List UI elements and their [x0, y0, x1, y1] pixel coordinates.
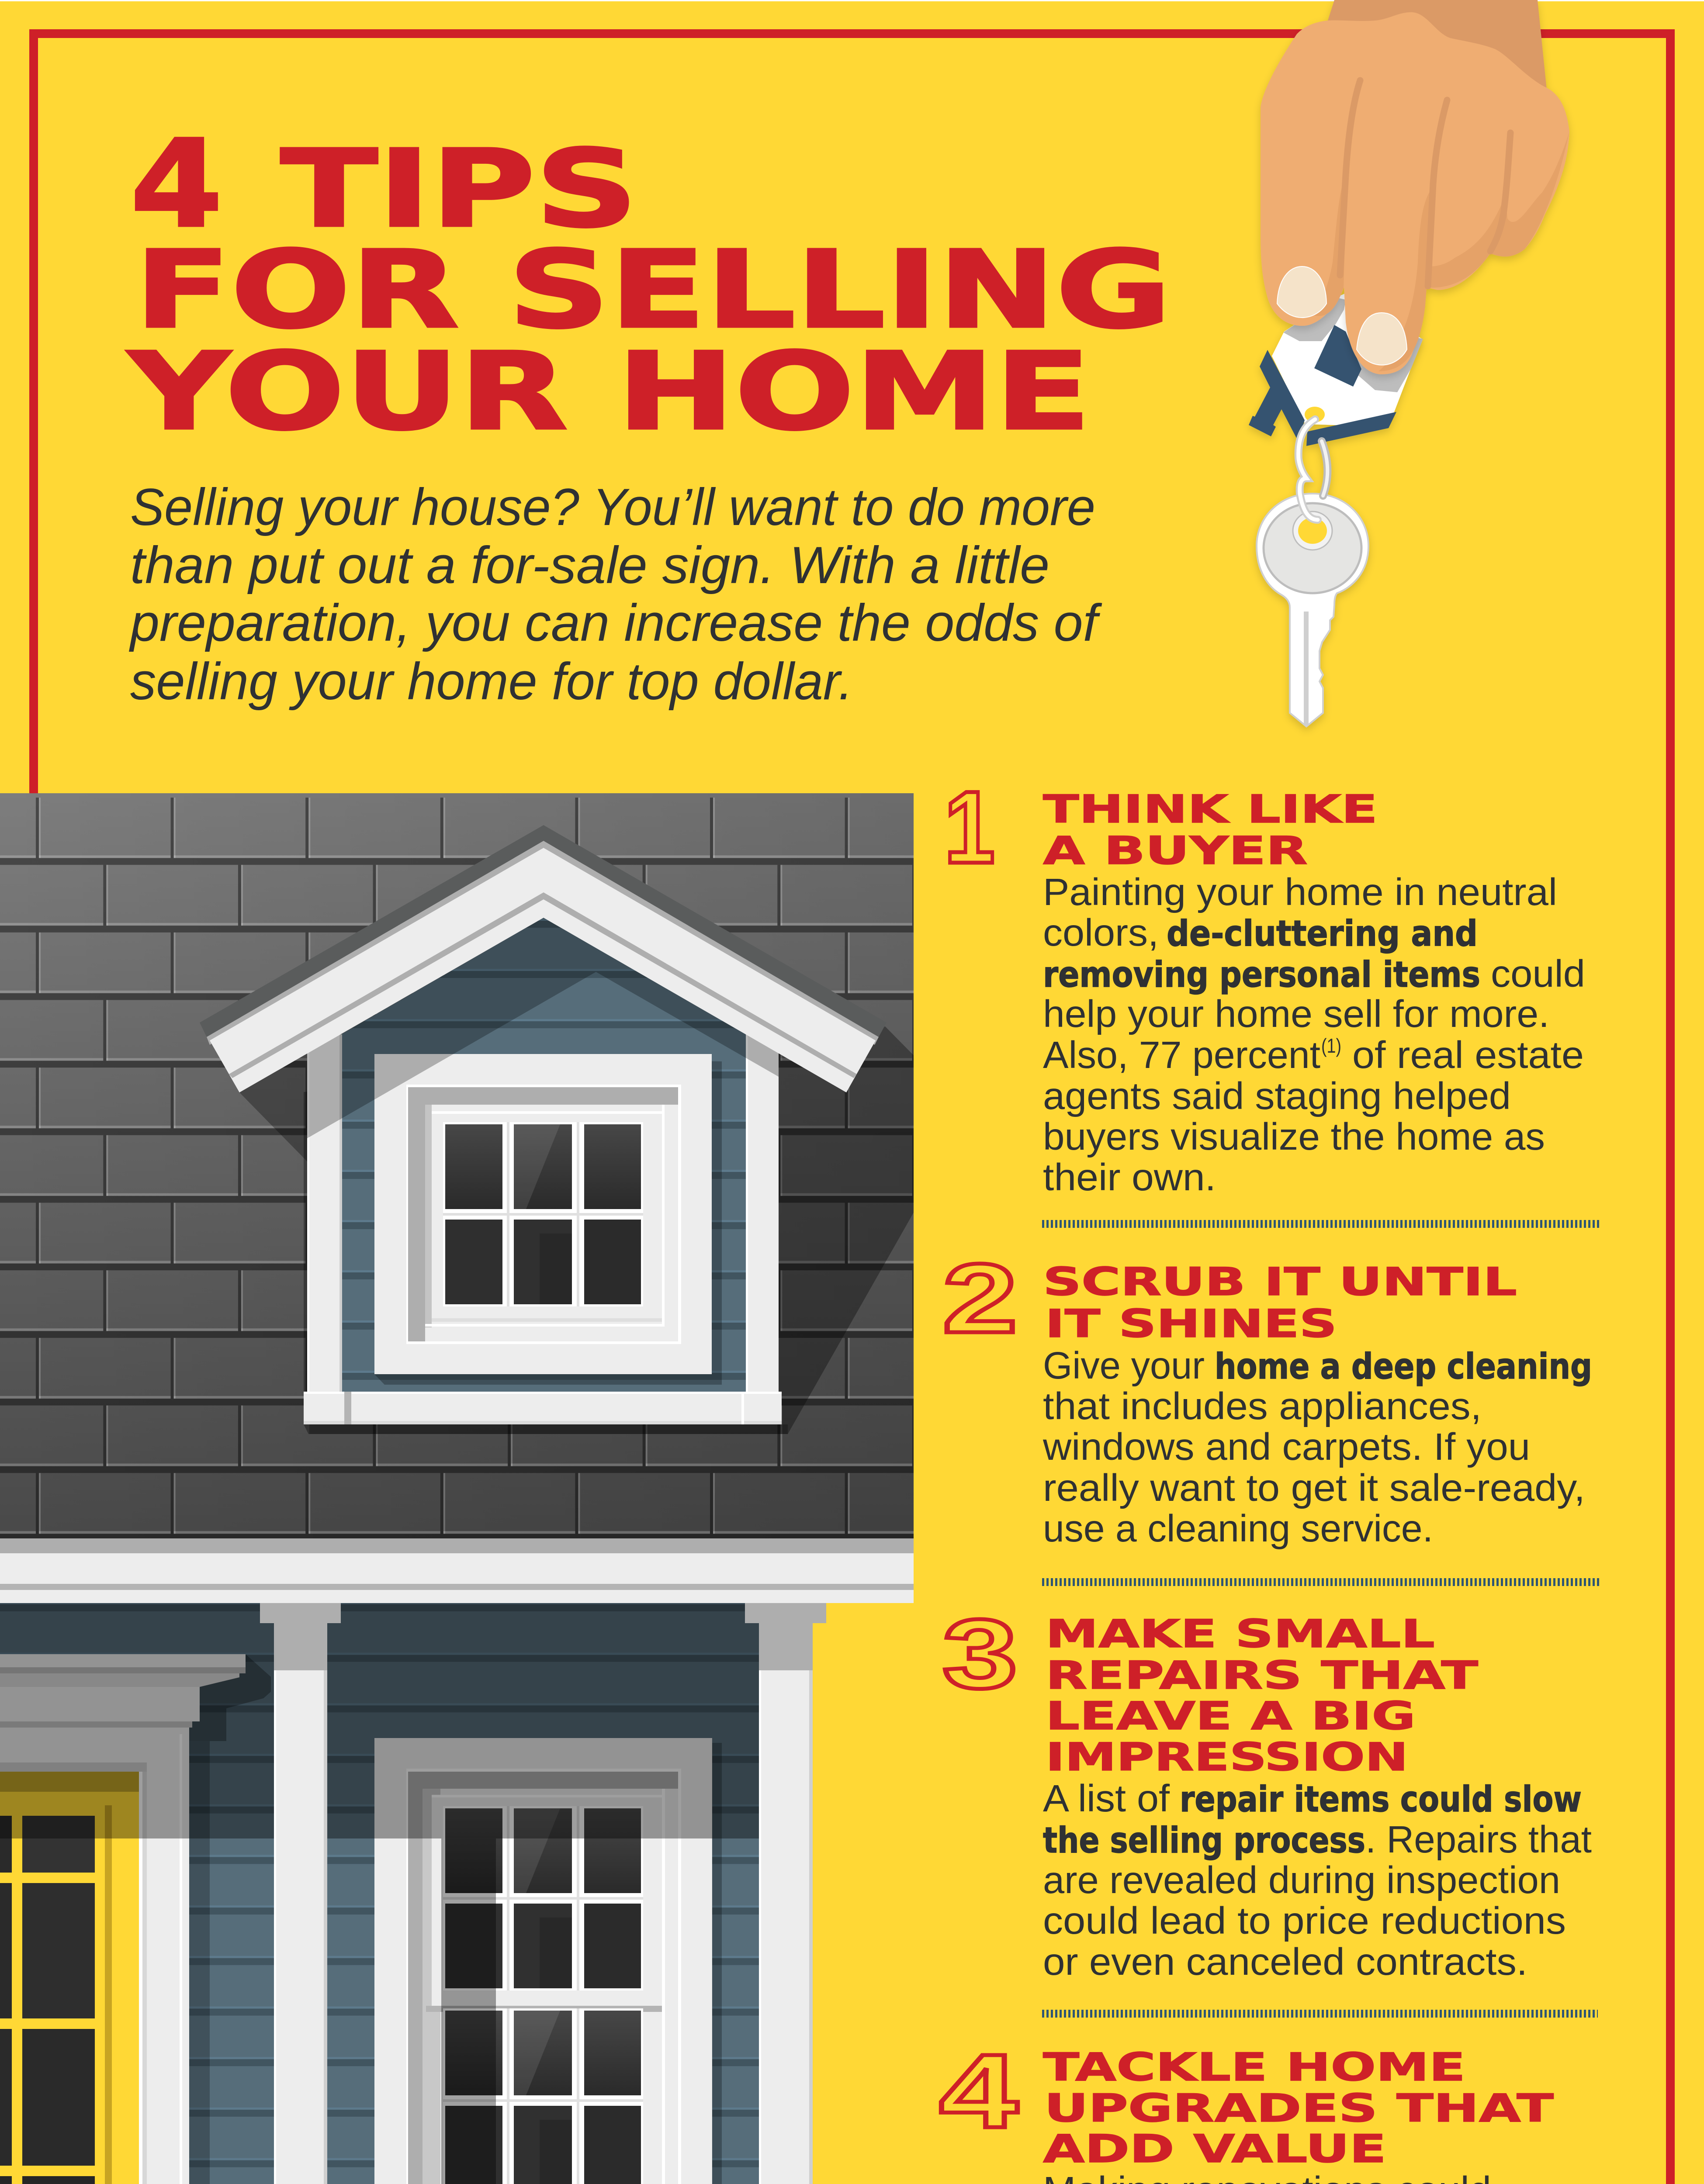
house illustration	[0, 793, 914, 2184]
tip 2 heading: IT SHINES	[1045, 1301, 1337, 1346]
tip 1 body: Also, 77 percent	[1043, 1034, 1320, 1076]
intro text: than put out a for-sale sign. With a little	[130, 536, 1049, 594]
tip 2 body: home a deep cleaning	[1215, 1346, 1592, 1387]
tip 1 heading: A BUYER	[1043, 828, 1308, 873]
title	[126, 114, 1171, 454]
tip 1 body: removing personal items	[1043, 954, 1480, 995]
tip 1 body: colors,	[1043, 912, 1159, 954]
tip 1 body: of real estate	[1352, 1034, 1584, 1076]
icon: fingernails	[1277, 266, 1407, 365]
porch roof shade	[0, 1603, 813, 1838]
porch window	[374, 1738, 712, 2184]
tip 2 body: Give your	[1043, 1344, 1205, 1387]
tip 1 body: (1)	[1321, 1034, 1341, 1057]
icon: hand	[1261, 0, 1569, 374]
tip 4 heading: ADD VALUE	[1043, 2126, 1386, 2171]
tip 3 body: repair items could slow	[1180, 1779, 1582, 1820]
porch wall	[0, 1603, 813, 2184]
title: FOR SELLING	[135, 228, 1171, 352]
icon: house tag	[1249, 293, 1423, 446]
tip 2 body: that includes appliances,	[1043, 1385, 1482, 1427]
tip 1 body: agents said staging helped	[1043, 1075, 1511, 1117]
tip 3 body: the selling process	[1043, 1820, 1365, 1861]
intro text: Selling your house? You’ll want to do more	[130, 478, 1095, 536]
tip 4 heading: UPGRADES THAT	[1044, 2086, 1554, 2131]
door surround and cornice	[0, 1654, 246, 2184]
icon: key ring	[1299, 419, 1327, 520]
number 4: 4	[939, 2032, 1018, 2149]
tip 3 body: . Repairs that	[1365, 1818, 1592, 1861]
finger creases	[1340, 80, 1510, 286]
roof shingles	[0, 793, 914, 1538]
keychain	[1249, 293, 1423, 726]
top edge strip	[0, 0, 1704, 1]
door window	[0, 1805, 105, 2184]
tip 1 body: could	[1491, 953, 1585, 995]
intro text: preparation, you can increase the odds of	[129, 594, 1102, 652]
dormer gable roof	[200, 825, 887, 1092]
number 3: 3	[942, 1599, 1018, 1709]
tip 3 heading: MAKE SMALL	[1046, 1611, 1435, 1656]
tip 2 heading	[1043, 1259, 1517, 1346]
tip 4	[939, 2032, 1594, 2184]
tip 1 heading	[1043, 787, 1378, 873]
tip 3 body: or even canceled contracts.	[1043, 1941, 1527, 1983]
tip 3 body: are revealed during inspection	[1043, 1859, 1560, 1901]
intro text	[129, 478, 1102, 711]
fascia board	[0, 1538, 914, 1603]
tip 2 body: use a cleaning service.	[1043, 1507, 1433, 1550]
tip 3 heading: REPAIRS THAT	[1046, 1653, 1478, 1698]
tip 1 body	[1043, 871, 1585, 1199]
dormer sill	[304, 1392, 788, 1434]
tip 3 body: could lead to price reductions	[1043, 1900, 1566, 1942]
porch columns	[260, 1603, 826, 2184]
tip 1 body: Painting your home in neutral	[1043, 871, 1557, 913]
tip 3 heading	[1046, 1611, 1478, 1780]
title: YOUR HOME	[126, 330, 1091, 454]
tip 2 body: windows and carpets. If you	[1042, 1426, 1530, 1468]
intro text: selling your home for top dollar.	[130, 652, 853, 711]
finger shading	[1311, 171, 1347, 316]
tip 3 heading: IMPRESSION	[1046, 1735, 1408, 1780]
tip 4 heading: TACKLE HOME	[1043, 2045, 1465, 2090]
title: TIPS	[281, 127, 638, 251]
tip 1 body: help your home sell for more.	[1043, 993, 1549, 1035]
tip 2 body: really want to get it sale-ready,	[1043, 1467, 1585, 1509]
tip 3 body	[1043, 1777, 1592, 1983]
yellow door	[0, 1772, 139, 2184]
tip 2 body	[1042, 1344, 1592, 1550]
tip 4 heading	[1043, 2045, 1554, 2171]
title: 4	[130, 114, 223, 255]
tip 3 body: A list of	[1043, 1777, 1170, 1820]
number 2: 2	[942, 1243, 1018, 1353]
tip 1	[944, 770, 1585, 1199]
tip 1 body: buyers visualize the home as	[1043, 1116, 1545, 1158]
number 1: 1	[944, 770, 995, 885]
dormer window	[374, 1054, 712, 1374]
tip 3 heading: LEAVE A BIG	[1046, 1693, 1416, 1738]
tip 2	[942, 1243, 1592, 1550]
tip 1 heading: THINK LIKE	[1043, 787, 1378, 832]
tip 1 body: de-cluttering and	[1167, 913, 1478, 954]
tip 2 heading: SCRUB IT UNTIL	[1043, 1259, 1517, 1304]
dormer	[200, 825, 887, 1434]
shadow across lower wall	[441, 1838, 496, 2184]
tip 1 body: their own.	[1043, 1156, 1216, 1199]
tip 3	[942, 1599, 1592, 1983]
icon: key	[1257, 494, 1368, 726]
